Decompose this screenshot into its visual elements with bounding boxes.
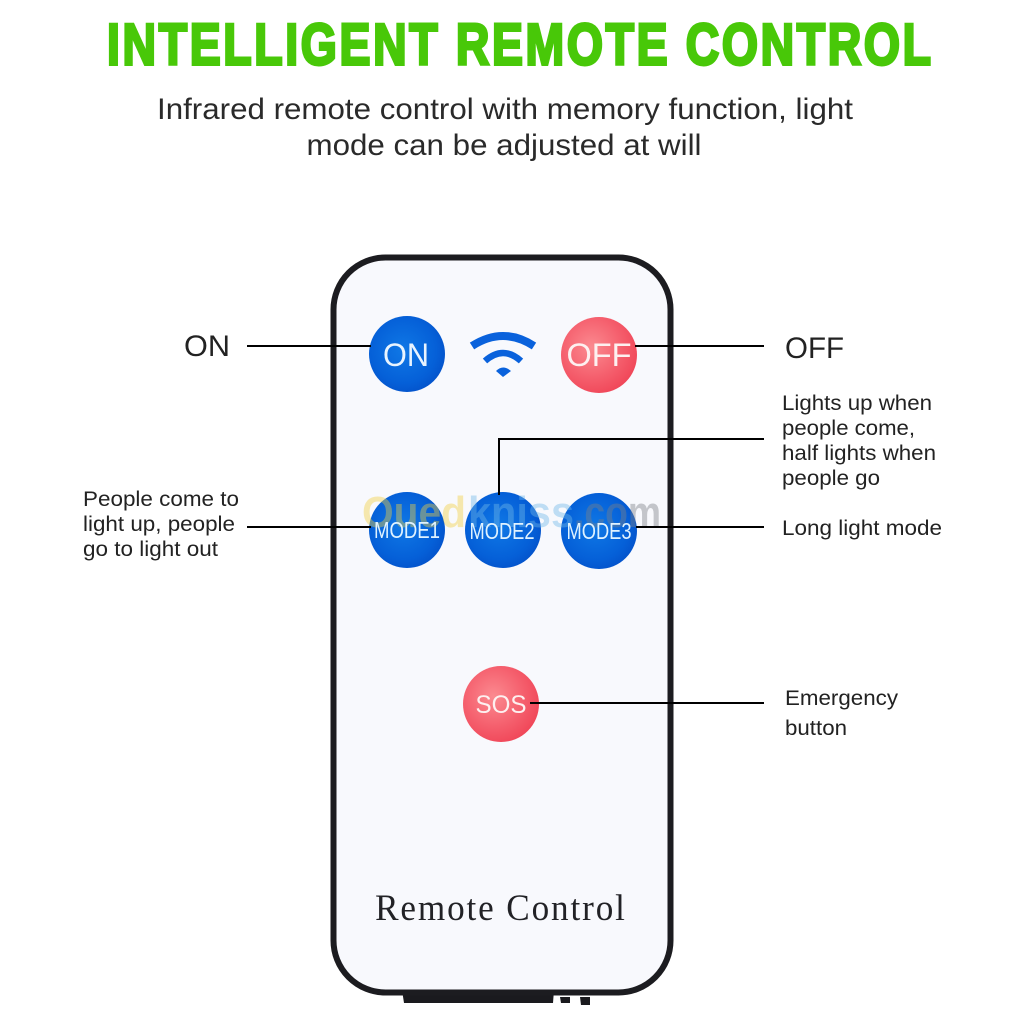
remote label: Remote Control bbox=[375, 887, 625, 928]
button: MODE3 bbox=[561, 493, 637, 569]
title: INTELLIGENT REMOTE CONTROL bbox=[107, 13, 931, 78]
watermark bbox=[362, 488, 661, 537]
button label: ON: ON bbox=[383, 337, 429, 373]
watermark: kniss bbox=[468, 488, 574, 537]
button label: MODE3: MODE3 bbox=[566, 518, 632, 544]
subtitle: Infrared remote control with memory function, light bbox=[157, 93, 854, 126]
label: MODE1 description: light up, people bbox=[83, 512, 235, 536]
button: MODE1 bbox=[369, 492, 445, 568]
button label: OFF: OFF bbox=[566, 337, 632, 373]
label: MODE2 description: Lights up when bbox=[782, 391, 932, 415]
button: ON bbox=[369, 316, 445, 392]
button: SOS: SOS bbox=[476, 691, 526, 719]
label: MODE2 description: people go bbox=[782, 466, 880, 490]
label: MODE1 description: go to light out bbox=[83, 537, 218, 561]
remote casing bbox=[334, 258, 670, 992]
label: SOS description: Emergency bbox=[785, 686, 898, 710]
label: MODE1 description bbox=[83, 487, 239, 561]
label: MODE2 description bbox=[782, 391, 936, 490]
subtitle: mode can be adjusted at will bbox=[306, 129, 702, 162]
watermark: Oued bbox=[362, 488, 466, 537]
label: SOS description bbox=[785, 686, 898, 740]
subtitle bbox=[157, 93, 854, 162]
label: MODE2 description: people come, bbox=[782, 416, 915, 440]
button: OFF bbox=[561, 317, 637, 393]
label: MODE2 description: half lights when bbox=[782, 441, 936, 465]
button: SOS bbox=[463, 666, 539, 742]
remote control body bbox=[334, 258, 670, 1005]
label: SOS description: button bbox=[785, 716, 847, 740]
button: MODE2 bbox=[465, 492, 541, 568]
label: OFF: OFF bbox=[785, 332, 844, 365]
button label: MODE2: MODE2 bbox=[470, 518, 534, 544]
label: MODE3 description: Long light mode bbox=[782, 516, 942, 540]
button label: MODE1: MODE1 bbox=[374, 517, 440, 543]
watermark: .com bbox=[574, 488, 661, 537]
icon: wifi signal bbox=[472, 336, 534, 377]
callout lines bbox=[247, 346, 764, 703]
label: ON: ON bbox=[184, 330, 230, 363]
remote bottom edge tab bbox=[402, 990, 590, 1005]
label: MODE1 description: People come to bbox=[83, 487, 239, 511]
